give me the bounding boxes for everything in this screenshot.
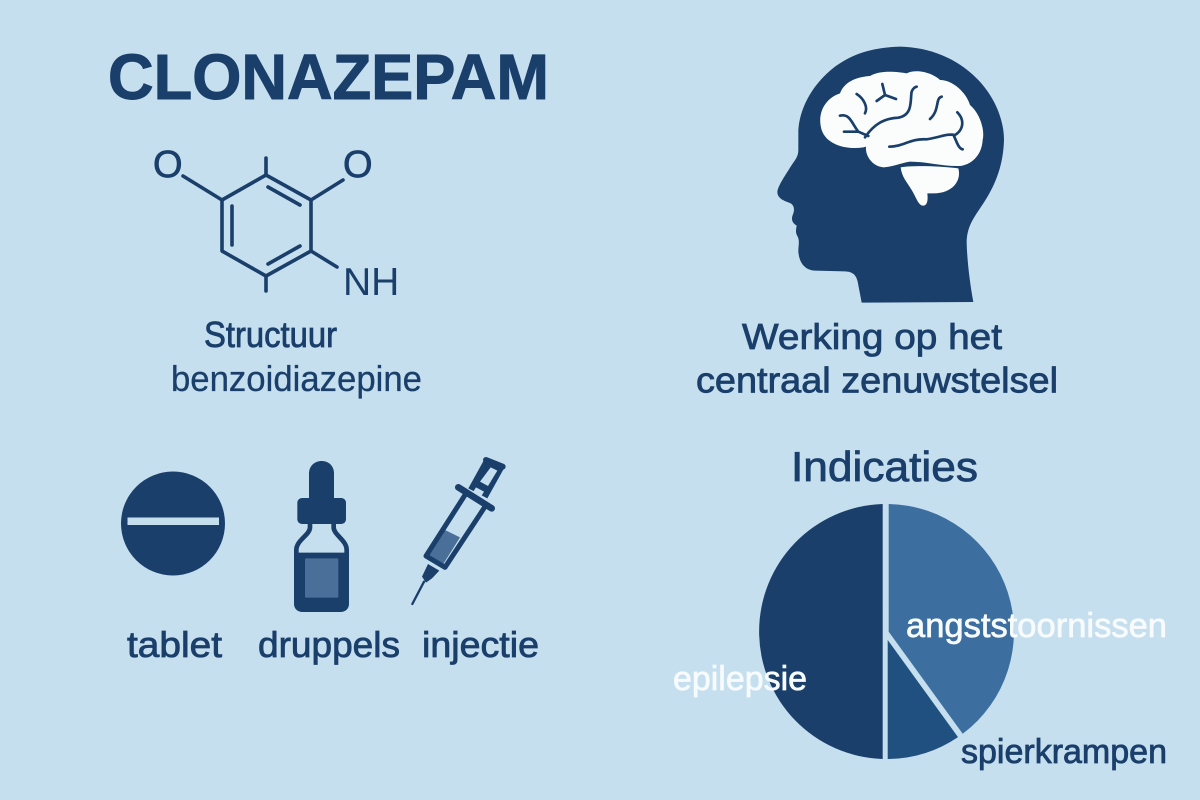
head silhouette	[777, 47, 1004, 303]
heading: indications: Indicaties	[791, 443, 978, 490]
nitrogen label: NH	[343, 261, 399, 304]
title: CLONAZEPAM	[108, 41, 549, 113]
pie chart	[759, 504, 1014, 759]
brain cerebrum	[820, 71, 983, 167]
slice: muscle cramps	[888, 640, 958, 759]
slice: anxiety disorders	[889, 504, 1014, 734]
text: central nervous system: centraal zenuwstelsel	[696, 360, 1058, 400]
label: drops: druppels	[258, 624, 400, 665]
label: anxiety disorders: angststoornissen	[906, 607, 1167, 645]
oxygen label right: O	[343, 144, 373, 186]
icon: tablet	[121, 472, 225, 576]
panel: chemical structure	[153, 144, 399, 304]
icon: molecule bonds	[183, 158, 343, 291]
label: injection: injectie	[422, 624, 539, 665]
brain folds	[840, 84, 963, 149]
heading: action on nervous system: Werking op het	[742, 316, 1002, 357]
label: epilepsy: epilepsie	[673, 660, 807, 698]
heading: structure: Structuur	[204, 314, 337, 355]
text: benzodiazepine: benzoidiazepine	[171, 358, 422, 399]
icon: dropper bottle	[294, 461, 349, 612]
icon: head with brain	[777, 47, 1004, 303]
label: tablet: tablet	[127, 624, 222, 665]
label: muscle cramps: spierkrampen	[961, 733, 1167, 771]
oxygen label left: O	[153, 144, 183, 186]
slice: epilepsy	[759, 504, 883, 759]
brain cerebellum	[901, 166, 959, 206]
icon: syringe	[412, 460, 504, 604]
